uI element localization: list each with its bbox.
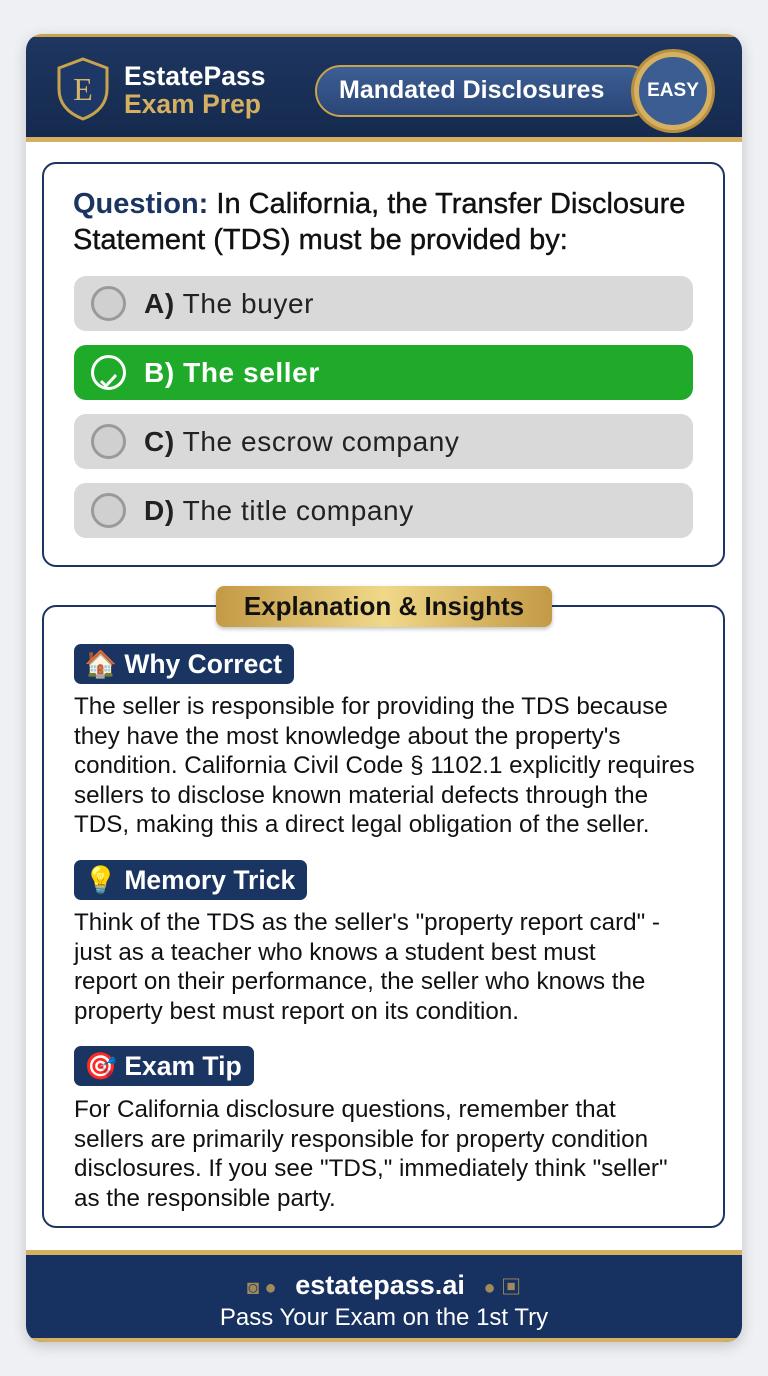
footer: [26, 1250, 742, 1342]
brand name: Exam Prep: [124, 89, 261, 119]
logo shield icon: E: [73, 71, 93, 107]
why correct text: [74, 693, 695, 838]
why correct tag: 🏠 Why Correct: [84, 649, 282, 679]
exam tip text: disclosures. If you see "TDS," immediately think "seller": [74, 1155, 668, 1182]
exam tip tag: [74, 1046, 254, 1086]
brand name: [124, 61, 265, 119]
question text: Question: In California, the Transfer Disclosure: [73, 188, 685, 220]
why correct text: they have the most knowledge about the property's: [74, 722, 620, 750]
question text: Statement (TDS) must be provided by:: [73, 224, 568, 256]
exam tip text: as the responsible party.: [74, 1184, 336, 1212]
memory trick text: [73, 909, 660, 1024]
memory trick text: just as a teacher who knows a student best must: [74, 938, 596, 966]
exam tip text: [74, 1096, 668, 1212]
memory trick text: report on their performance, the seller who knows the: [74, 968, 645, 995]
topic pill: Mandated Disclosures: [339, 76, 604, 104]
brand name: EstatePass: [124, 61, 265, 91]
exam tip tag: 🎯 Exam Tip: [84, 1051, 242, 1081]
exam tip text: sellers are primarily responsible for property condition: [74, 1126, 648, 1152]
option C: C) The escrow company: [144, 426, 460, 457]
logo shield icon: [58, 57, 108, 121]
memory trick text: Think of the TDS as the seller's "property report card" -: [74, 909, 660, 936]
header: [26, 34, 742, 142]
memory trick text: property best must report on its condition.: [74, 998, 519, 1024]
memory trick tag: [74, 860, 307, 900]
option A: [74, 276, 693, 331]
explanation heading badge: Explanation & Insights: [244, 591, 524, 621]
social icons and website: ◙ ● estatepass.ai ● ▣: [247, 1270, 521, 1300]
why correct tag: [74, 644, 294, 684]
why correct text: condition. California Civil Code § 1102.1 explicitly requires: [74, 752, 695, 779]
option D: D) The title company: [144, 495, 414, 526]
option B correct: [74, 345, 693, 400]
option A: A) The buyer: [144, 288, 314, 319]
option B correct: B) The seller: [144, 357, 320, 388]
option C: [74, 414, 693, 469]
explanation heading badge: [216, 586, 552, 627]
exam tip text: For California disclosure questions, remember that: [74, 1096, 616, 1123]
explanation card: [42, 605, 725, 1228]
tagline: Pass Your Exam on the 1st Try: [220, 1304, 548, 1331]
option D: [74, 483, 693, 538]
why correct text: TDS, making this a direct legal obligation of the seller.: [74, 811, 649, 838]
memory trick tag: 💡 Memory Trick: [84, 865, 295, 895]
difficulty badge: [634, 52, 712, 130]
why correct text: sellers to disclose known material defects through the: [74, 782, 648, 808]
topic pill: [315, 65, 655, 117]
why correct text: The seller is responsible for providing the TDS because: [74, 693, 668, 720]
question text: [73, 188, 685, 256]
difficulty badge: EASY: [647, 80, 699, 101]
question card: [42, 162, 725, 567]
